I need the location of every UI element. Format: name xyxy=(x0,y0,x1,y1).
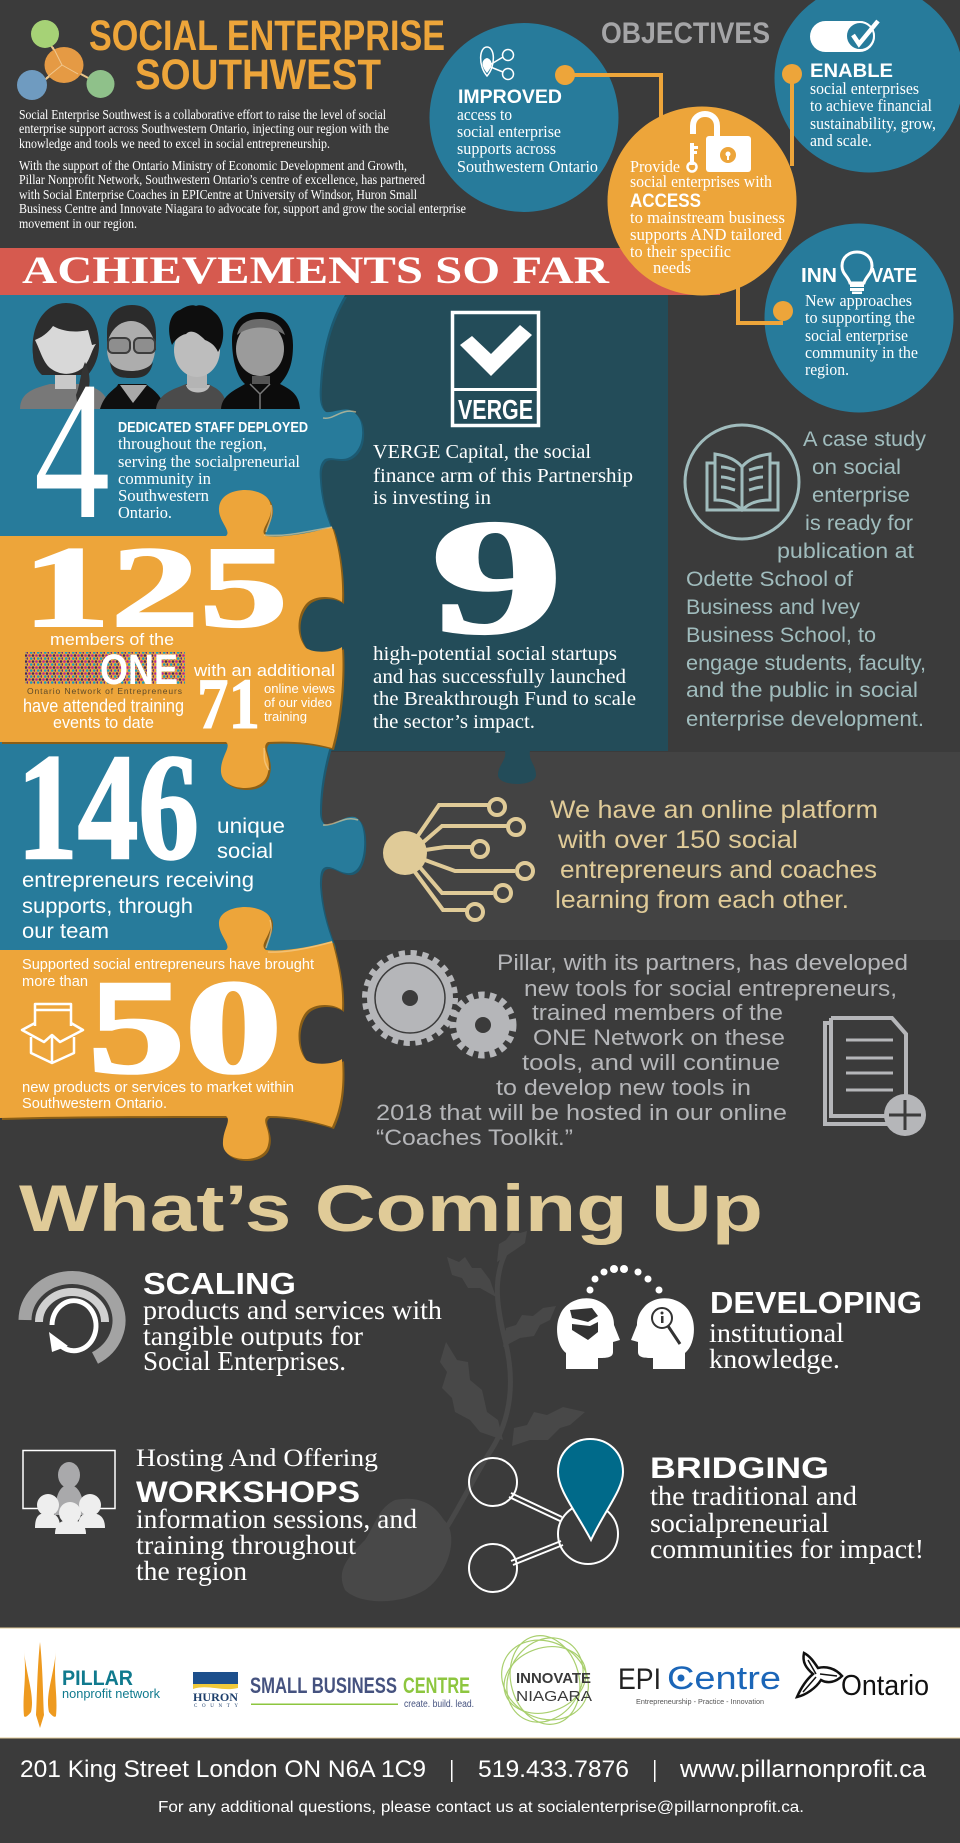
panel: innovate objective: VATE xyxy=(871,265,917,287)
text block: new tools: to develop new tools in xyxy=(496,1075,751,1100)
logo: small business centre: SMALL BUSINESS xyxy=(250,1673,397,1698)
text block: new tools: 2018 that will be hosted in our online xyxy=(376,1100,787,1125)
logo: small business centre: CENTRE xyxy=(403,1673,470,1698)
panel: innovate objective: New approaches xyxy=(805,291,912,310)
stat: 146 entrepreneurs: social xyxy=(217,840,273,863)
text block: new tools xyxy=(376,950,908,1150)
item: scaling: tangible outputs for xyxy=(143,1321,363,1351)
text block: case study: is ready for xyxy=(805,512,913,535)
icon: network nodes xyxy=(383,799,533,920)
band: online platform background xyxy=(300,752,960,940)
text block: online platform: learning from each other. xyxy=(555,886,849,914)
stat: 125 members: with an additional xyxy=(193,661,335,680)
text block: case study: enterprise xyxy=(812,484,910,507)
text block: verge capital: the sector’s impact. xyxy=(373,711,535,733)
logo: ONE network xyxy=(25,646,185,696)
panel: innovate objective xyxy=(764,224,954,412)
text block: online platform: We have an online platform xyxy=(550,796,878,824)
banner: achievements so far: ACHIEVEMENTS SO FAR xyxy=(22,249,610,292)
panel: enable objective: social enterprises xyxy=(810,79,919,98)
icon: share pin xyxy=(481,47,514,80)
stat: 125 members: of our video xyxy=(264,695,332,710)
footer: contact details: www.pillarnonprofit.ca xyxy=(679,1756,927,1783)
panel: enable objective: sustainability, grow, xyxy=(810,114,936,133)
text block: introduction: With the support of the Ontario Ministry of Economic Development and Growth, xyxy=(19,158,407,173)
text block: verge capital: and has successfully launched xyxy=(373,666,626,688)
connectors: objectives xyxy=(555,64,802,323)
text block: case study: A case study xyxy=(803,428,927,451)
stat: 50 new products: more than xyxy=(22,973,88,990)
text block: case study: Odette School of xyxy=(686,568,853,591)
stat: 146 entrepreneurs: supports, through xyxy=(22,895,193,918)
panel: enable objective: to achieve financial xyxy=(810,96,932,115)
panel: improved objective: supports across xyxy=(457,139,556,158)
text block: case study: Business School, to xyxy=(686,624,876,647)
logo: epicentre: Entrepreneurship - Practice - Innovation xyxy=(636,1699,764,1706)
item: bridging: the traditional and xyxy=(650,1481,858,1511)
stat: 4 dedicated staff: community in xyxy=(118,469,211,488)
heading: objectives: OBJECTIVES xyxy=(601,17,770,50)
logo: ontario xyxy=(797,1653,929,1702)
icon: open box xyxy=(22,1004,83,1063)
panel: improved objective: social enterprise xyxy=(457,122,561,141)
background: plant silhouette xyxy=(342,1231,585,1601)
item: developing: DEVELOPING xyxy=(710,1285,922,1320)
text block: verge capital: the Breakthrough Fund to scale xyxy=(373,688,636,710)
text block: introduction: Business Centre and Innovate Niagara to advocate for, support and grow the social enterprise xyxy=(19,201,466,216)
stat: 125 members: members of the xyxy=(50,630,174,649)
icon: gears xyxy=(366,954,512,1054)
stat: 125 members: online views xyxy=(264,681,335,696)
icon: document with plus xyxy=(825,1018,926,1136)
logo: innovate niagara: INNOVATE xyxy=(516,1670,591,1687)
stat: 4 dedicated staff: 4 xyxy=(34,341,110,560)
panel: access objective: social enterprises with xyxy=(630,172,772,191)
stat: 146 entrepreneurs: our team xyxy=(22,920,109,943)
icon: light bulb xyxy=(842,252,872,294)
text block: case study: and the public in social xyxy=(686,679,918,702)
stat: 50 new products xyxy=(22,953,315,1112)
text block: new tools: ONE Network on these xyxy=(533,1025,785,1050)
item: workshops: WORKSHOPS xyxy=(136,1476,360,1509)
portrait 2 xyxy=(100,305,166,409)
text block: introduction: Social Enterprise Southwest is a collaborative effort to raise the level of social xyxy=(19,107,386,122)
text block: verge capital: finance arm of this Partnership xyxy=(373,465,633,487)
logo: ONE network: ONE xyxy=(100,646,178,694)
item: scaling: products and services with xyxy=(143,1295,443,1325)
logo: huron county xyxy=(193,1672,238,1709)
logo: ONE network: Ontario Network of Entrepreneurs xyxy=(27,686,182,696)
text block: introduction: enterprise support across Southwestern Ontario, injecting our region with the xyxy=(19,121,389,136)
text block: case study: publication at xyxy=(777,540,914,563)
panel: access objective: needs xyxy=(653,258,691,277)
item: bridging: socialpreneurial xyxy=(650,1508,829,1538)
stat: 146 entrepreneurs: 146 xyxy=(17,723,199,891)
logo: verge: VERGE xyxy=(458,394,533,425)
item: bridging: BRIDGING xyxy=(650,1452,829,1485)
text block: verge capital: VERGE Capital, the social xyxy=(373,441,591,463)
stat: 125 members: 125 xyxy=(22,524,288,652)
stat: 50 new products: Southwestern Ontario. xyxy=(22,1095,167,1112)
stat: 4 dedicated staff: throughout the region, xyxy=(118,434,267,453)
text block: verge capital: high-potential social startups xyxy=(373,643,617,665)
panel: enable objective: ENABLE xyxy=(810,61,893,82)
footer: contact details: 519.433.7876 xyxy=(478,1756,629,1783)
logo: small business centre: create. build. lead. xyxy=(404,1699,474,1710)
text block: verge capital: 9 xyxy=(431,487,563,668)
icon: lock and key xyxy=(688,114,751,172)
panel: innovate objective: community in the xyxy=(805,343,918,362)
text block: new tools: “Coaches Toolkit.” xyxy=(376,1125,573,1150)
text block: new tools: new tools for social entrepreneurs, xyxy=(524,976,897,1001)
title: SOCIAL ENTERPRISE xyxy=(89,12,445,60)
stat: 4 dedicated staff: Southwestern xyxy=(118,486,209,505)
text block: introduction: with Social Enterprise Coaches in EPICentre at University of Windsor, Huron Small xyxy=(19,187,417,202)
item: workshops: information sessions, and xyxy=(136,1504,417,1534)
icon: open book in circle xyxy=(685,425,799,539)
panel: innovate objective: region. xyxy=(805,360,849,379)
heading: what's coming up: What’s Coming Up xyxy=(19,1171,763,1245)
item: developing: knowledge. xyxy=(709,1344,840,1374)
panel: partner logos xyxy=(0,1624,960,1738)
icon: scaling arcs xyxy=(25,1278,119,1358)
logo: epicentre: Centre xyxy=(667,1660,781,1696)
footer: contact details: For any additional questions, please contact us at socialenterprise@pillarnonprofit.ca. xyxy=(158,1799,804,1816)
panel: improved objective: IMPROVED xyxy=(458,87,562,108)
logo: pillar: nonprofit network xyxy=(62,1686,160,1701)
panel: innovate objective: to supporting the xyxy=(805,308,915,327)
stat: 125 members: 71 xyxy=(197,664,260,744)
stat: 4 dedicated staff: Ontario. xyxy=(118,503,172,522)
logo: pillar xyxy=(24,1642,160,1728)
text block: introduction: knowledge and tools we need to excel in social entrepreneurship. xyxy=(19,136,330,151)
panel: improved objective: Southwestern Ontario xyxy=(457,157,598,176)
icon: four staff portraits xyxy=(20,303,300,409)
text block: online platform: entrepreneurs and coaches xyxy=(560,856,877,884)
portrait 3 xyxy=(156,305,227,409)
icon: heads with dots xyxy=(557,1265,694,1369)
panel: innovate objective: social enterprise xyxy=(805,326,908,345)
portrait 4 xyxy=(221,312,300,409)
stat: 146 entrepreneurs: unique xyxy=(217,815,285,838)
item: developing: institutional xyxy=(709,1318,844,1348)
puzzle piece: blue 2 xyxy=(0,740,364,960)
stat: 4 dedicated staff: serving the socialpreneurial xyxy=(118,452,300,471)
stat: 125 members: training xyxy=(264,709,307,724)
text block: case study: Business and Ivey xyxy=(686,596,861,619)
text block: case study: enterprise development. xyxy=(686,708,924,731)
stat: 146 entrepreneurs xyxy=(17,723,285,943)
logo: huron county: COUNTY xyxy=(194,1704,238,1709)
text block: introduction xyxy=(19,107,466,231)
stat: 125 members: have attended training xyxy=(23,696,184,716)
item: workshops xyxy=(23,1445,417,1586)
panel: access objective: ACCESS xyxy=(630,191,701,212)
stat: 125 members xyxy=(22,524,335,744)
stat: 125 members: events to date xyxy=(53,713,154,732)
panel: enable objective xyxy=(774,0,960,172)
puzzle piece: blue 1 xyxy=(0,295,362,545)
item: scaling: SCALING xyxy=(143,1266,296,1301)
logo: huron county: HURON xyxy=(193,1690,238,1704)
text block: verge capital: is investing in xyxy=(373,487,491,509)
puzzle highlights xyxy=(264,411,358,952)
text block: new tools: tools, and will continue xyxy=(522,1050,780,1075)
item: bridging xyxy=(469,1439,924,1592)
item: scaling: Social Enterprises. xyxy=(143,1346,346,1376)
logo: epicentre xyxy=(618,1660,781,1706)
text block: new tools: Pillar, with its partners, has developed xyxy=(497,950,908,975)
stat: 50 new products: new products or services to market within xyxy=(22,1079,294,1096)
text block: online platform: with over 150 social xyxy=(557,826,798,854)
item: scaling xyxy=(25,1266,443,1376)
logo: innovate niagara: NIAGARA xyxy=(516,1688,592,1705)
item: workshops: the region xyxy=(136,1556,248,1586)
panel: access objective: supports AND tailored xyxy=(630,225,782,244)
text block: new tools: trained members of the xyxy=(532,1000,783,1025)
panel: innovate objective: INN xyxy=(801,265,837,287)
puzzle piece: orange 1 xyxy=(0,490,343,788)
footer: contact details: 201 King Street London ON N6A 1C9 xyxy=(20,1756,426,1783)
logo: innovate niagara xyxy=(487,1624,603,1736)
text block: case study: on social xyxy=(812,456,901,479)
banner: achievements so far xyxy=(0,248,720,295)
logo: ontario: Ontario xyxy=(841,1670,929,1702)
logo: small business centre xyxy=(250,1673,474,1710)
footer: contact details xyxy=(20,1756,927,1816)
panel: access objective: to mainstream business xyxy=(630,208,785,227)
panel: enable objective: and scale. xyxy=(810,131,872,150)
logo: pillar: PILLAR xyxy=(62,1667,133,1690)
logo: social enterprise network xyxy=(17,20,114,100)
title: SOUTHWEST xyxy=(135,51,381,99)
icon: audience and presenter xyxy=(23,1450,115,1534)
panel: access objective xyxy=(608,106,796,296)
panel: access objective: to their specific xyxy=(630,242,731,261)
icon: toggle check xyxy=(810,21,878,52)
panel: improved objective: access to xyxy=(457,105,512,124)
title xyxy=(89,12,445,99)
panel: improved objective xyxy=(430,23,618,212)
text block: verge capital xyxy=(373,441,636,733)
stat: 4 dedicated staff: DEDICATED STAFF DEPLOYED xyxy=(118,419,308,436)
item: developing xyxy=(557,1265,922,1374)
text block: case study: engage students, faculty, xyxy=(686,652,926,675)
item: workshops: Hosting And Offering xyxy=(136,1445,379,1472)
stat: 50 new products: 50 xyxy=(88,953,282,1101)
portrait 1 xyxy=(20,303,108,409)
item: bridging: communities for impact! xyxy=(650,1534,924,1564)
puzzle tab: teal lower xyxy=(498,751,536,784)
stat: 146 entrepreneurs: entrepreneurs receiving xyxy=(22,869,254,892)
text block: case study xyxy=(686,428,927,731)
puzzle piece: orange 2 xyxy=(0,907,343,1159)
stat: 50 new products: Supported social entrepreneurs have brought xyxy=(22,956,315,973)
text block: introduction: movement in our region. xyxy=(19,216,137,231)
text block: introduction: Pillar Nonprofit Network, Southwestern Ontario’s centre of excellence, has partnered xyxy=(19,172,425,187)
panel: access objective: Provide xyxy=(630,157,680,176)
item: workshops: training throughout xyxy=(136,1530,357,1560)
logo: verge xyxy=(452,312,539,426)
icon: connected circles and pin xyxy=(469,1439,623,1592)
logo: epicentre: EPI xyxy=(618,1663,661,1696)
stat: 4 dedicated staff xyxy=(34,341,308,560)
panel: verge capital background xyxy=(290,295,668,751)
text block: online platform xyxy=(550,796,878,914)
